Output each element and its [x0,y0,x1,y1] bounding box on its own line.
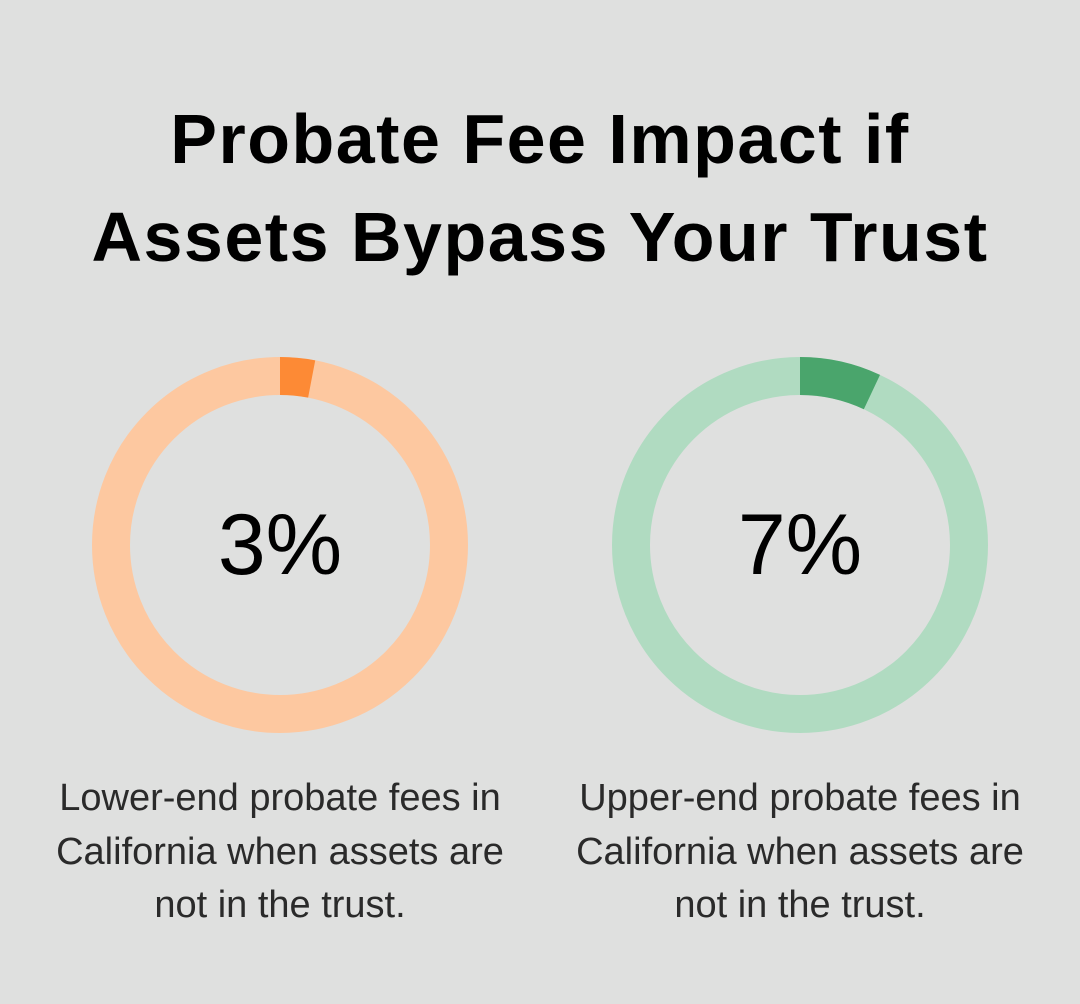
caption: lower-end: Lower-end probate fees in California when assets are not in the trust. [56,777,504,926]
value: 3%: 3% [218,497,342,593]
panel: upper-end donut chart [612,357,988,733]
title: Assets Bypass Your Trust [91,198,989,276]
panel: lower-end donut chart [92,357,468,733]
value: 7%: 7% [738,497,862,593]
title: Probate Fee Impact if [170,100,910,178]
caption: upper-end: Upper-end probate fees in California when assets are not in the trust. [576,777,1024,926]
title [91,100,989,276]
